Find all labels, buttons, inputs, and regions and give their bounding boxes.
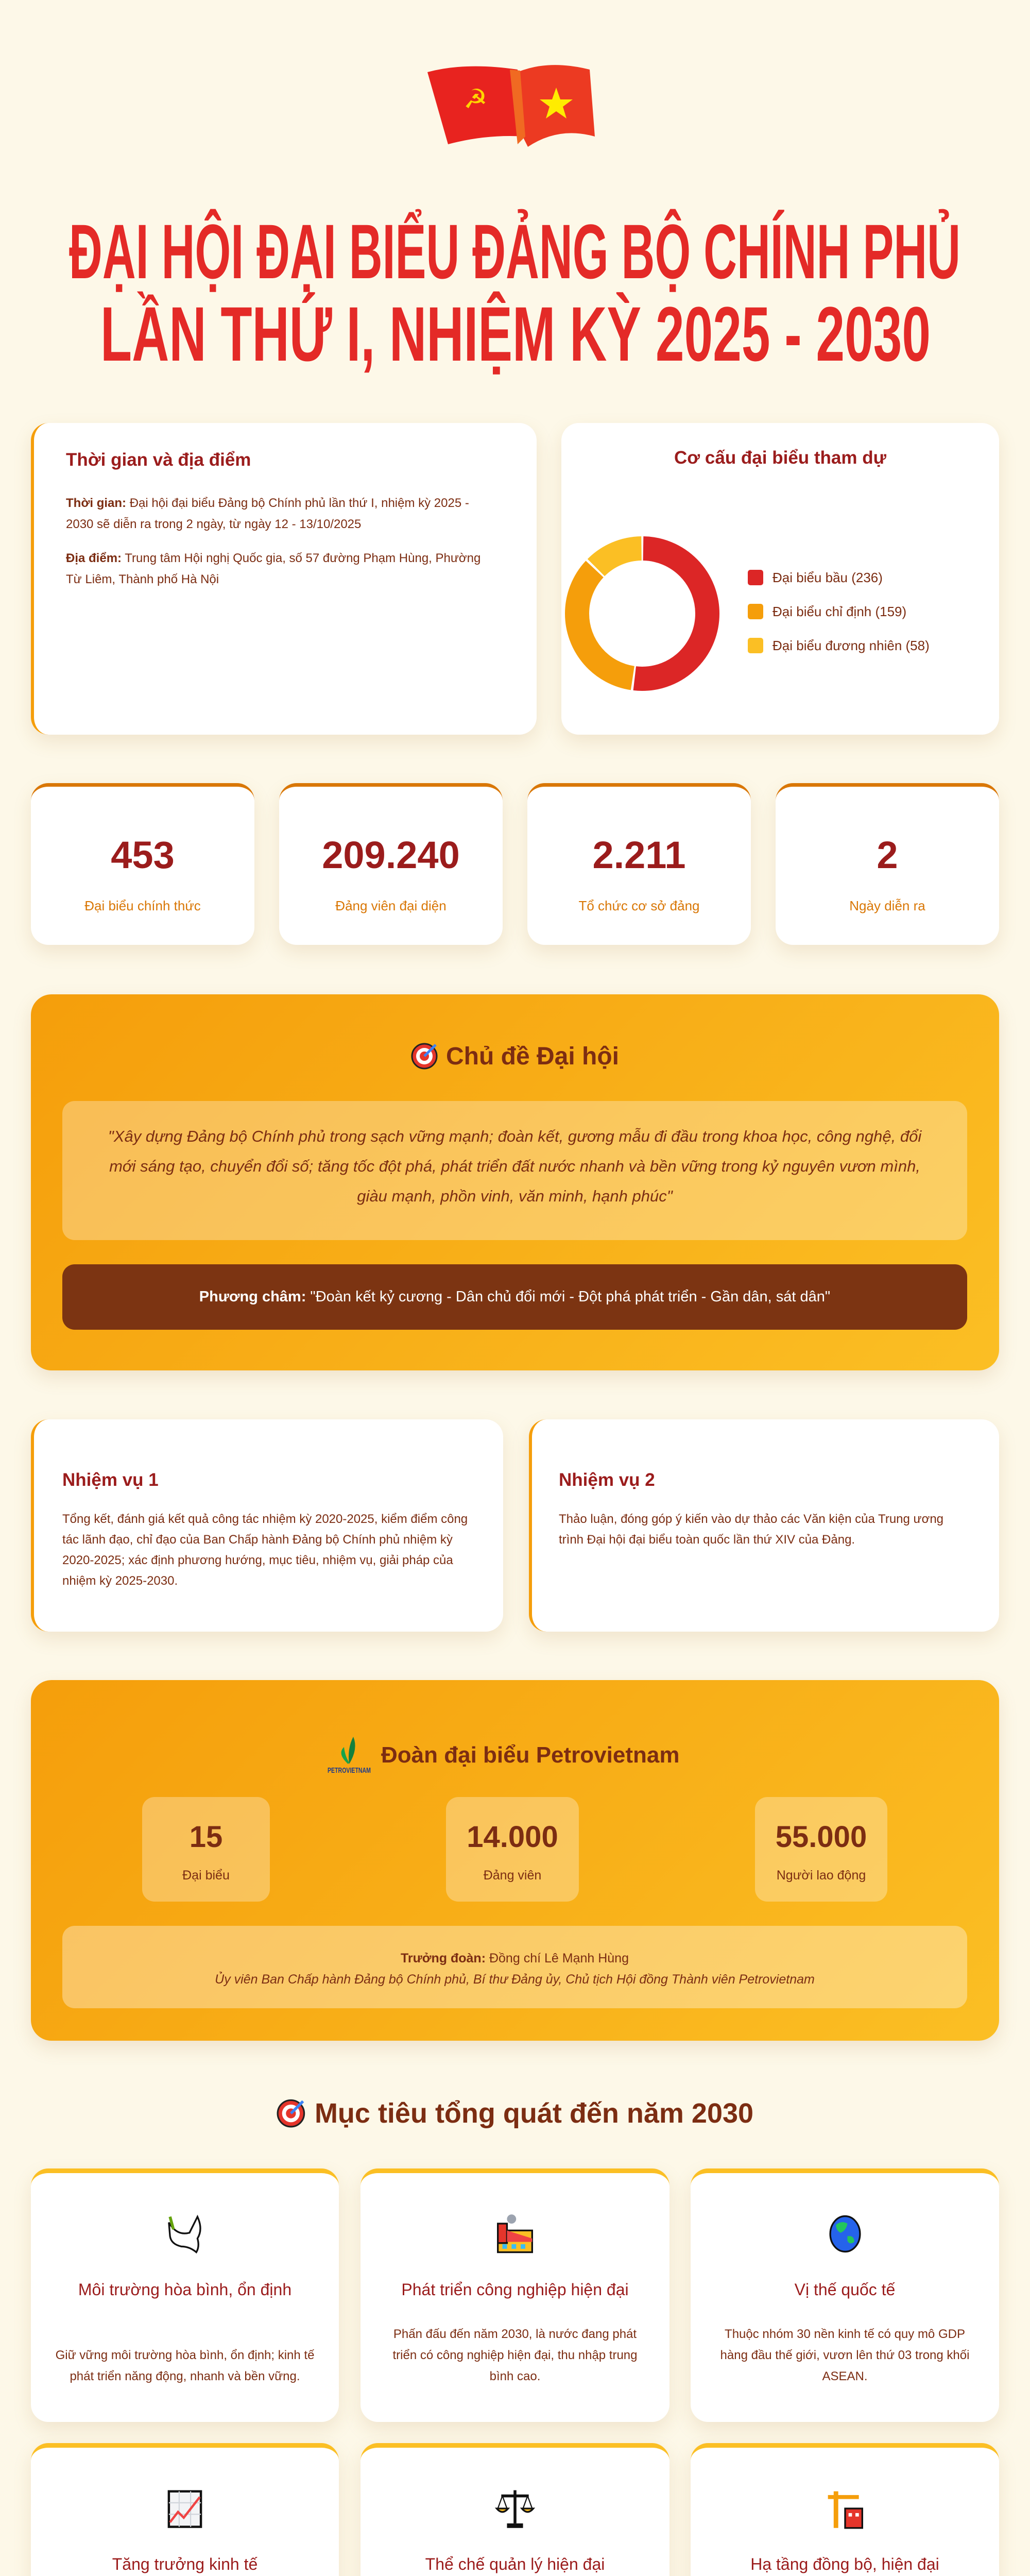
goal card: international: Vị thế quốc tế	[795, 2280, 895, 2299]
flag logo: ☭	[464, 84, 488, 115]
heading: general goals to 2030: Mục tiêu tổng quát đến năm 2030	[315, 2098, 753, 2129]
goal card: infrastructure: Hạ tầng đồng bộ, hiện đại	[750, 2555, 939, 2573]
title	[69, 208, 960, 376]
task 2	[529, 1419, 999, 1632]
goal card: industry: Phát triển công nghiệp hiện đại	[401, 2280, 629, 2299]
text: time and place details: Địa điểm: Trung tâm Hội nghị Quốc gia, số 57 đường Phạm Hùng, Phường Từ Liêm, Thành phố Hà Nội	[66, 551, 480, 586]
stat: 55.000 workers	[755, 1797, 887, 1902]
goal card: industry	[360, 2168, 670, 2422]
leader box: Ủy viên Ban Chấp hành Đảng bộ Chính phủ, Bí thư Đảng ủy, Chủ tịch Hội đồng Thành viên Petrovietnam	[215, 1972, 815, 1987]
heading: theme: Chủ đề Đại hội	[446, 1043, 619, 1070]
stat: 453	[31, 783, 254, 945]
quote box: "Xây dựng Đảng bộ Chính phủ trong sạch vững mạnh; đoàn kết, gương mẫu đi đầu trong khoa học, công nghệ, đổi mới sáng tạo, chuyển đổi số; tăng tốc đột phá, phát triển đất nước nhanh và bền vững trong kỷ nguyên vươn mình, giàu mạnh, phồn vinh, văn minh, hạnh phúc"	[108, 1127, 921, 1205]
stat: 453: Đại biểu chính thức	[84, 898, 201, 913]
heading: Petrovietnam: Đoàn đại biểu Petrovietnam	[381, 1742, 679, 1768]
quote box	[62, 1101, 967, 1240]
goal card: peace	[31, 2168, 339, 2422]
legend: Đại biểu chỉ định (159)	[772, 604, 906, 619]
stat: 209.240	[279, 783, 503, 945]
stat: 453: 453	[111, 834, 175, 876]
goal card: industry: Phấn đấu đến năm 2030, là nước đang phát triển có công nghiệp hiện đại, thu nhập trung bình cao.	[392, 2327, 638, 2383]
stat: 15 delegates: Đại biểu	[182, 1868, 230, 1883]
stat: 2	[776, 783, 999, 945]
goal card: infrastructure	[691, 2443, 999, 2576]
legend: Đại biểu bầu (236)	[772, 570, 883, 585]
motto bar	[62, 1264, 967, 1330]
flag logo	[427, 65, 595, 147]
stat: 55.000 workers: Người lao động	[777, 1868, 866, 1883]
stat: 2.211	[527, 783, 751, 945]
goal card: peace: Giữ vững môi trường hòa bình, ổn định; kinh tế phát triển năng động, nhanh và bền vững.	[56, 2348, 314, 2383]
text: time and place details: Thời gian: Đại hội đại biểu Đảng bộ Chính phủ lần thứ I, nhiệm kỳ 2025 - 2030 sẽ diễn ra trong 2 ngày, từ ngày 12 - 13/10/2025	[66, 496, 469, 531]
panel: theme	[31, 994, 999, 1370]
legend	[748, 570, 930, 653]
task 2: Nhiệm vụ 2	[559, 1470, 655, 1490]
heading: time and place: Thời gian và địa điểm	[66, 450, 251, 470]
stat: 55.000 workers: 55.000	[776, 1820, 867, 1854]
goal card: peace: Môi trường hòa bình, ổn định	[78, 2280, 291, 2299]
stat: 14.000 party members: Đảng viên	[484, 1868, 541, 1883]
goal card: economic growth: Tăng trưởng kinh tế	[112, 2555, 258, 2573]
motto bar: Phương châm: "Đoàn kết kỷ cương - Dân chủ đổi mới - Đột phá phát triển - Gần dân, sát dân"	[199, 1289, 830, 1305]
stat: 2: 2	[877, 834, 898, 876]
stat: 15 delegates	[142, 1797, 270, 1902]
stat: 2.211: 2.211	[592, 834, 686, 876]
donut chart	[565, 536, 719, 691]
logo: petrovietnam	[328, 1737, 371, 1775]
stat: 209.240: Đảng viên đại diện	[335, 898, 447, 913]
text: time and place details	[66, 496, 480, 586]
panel: delegate structure	[561, 423, 999, 735]
task 2: Thảo luận, đóng góp ý kiến vào dự thảo các Văn kiện của Trung ương trình Đại hội đại biểu toàn quốc lần thứ XIV của Đảng.	[559, 1512, 943, 1547]
stat: 14.000 party members	[446, 1797, 579, 1902]
goal card: economic growth	[31, 2443, 339, 2576]
goal card: institutions	[360, 2443, 670, 2576]
stat: 209.240: 209.240	[322, 834, 460, 876]
task 1	[31, 1419, 503, 1632]
heading: delegate structure: Cơ cấu đại biểu tham dự	[674, 448, 886, 468]
legend: Đại biểu đương nhiên (58)	[772, 638, 930, 653]
leader box: Trưởng đoàn: Đồng chí Lê Mạnh Hùng	[401, 1951, 629, 1965]
stat: 15 delegates: 15	[190, 1820, 222, 1854]
leader box	[62, 1926, 967, 2008]
stat: 2.211: Tổ chức cơ sở đảng	[578, 898, 700, 913]
task 1: Tổng kết, đánh giá kết quả công tác nhiệm kỳ 2020-2025, kiểm điểm công tác lãnh đạo, chỉ đạo của Ban Chấp hành Đảng bộ Chính phủ nhiệm kỳ 2020-2025; xác định phương hướng, mục tiêu, nhiệm vụ, giải pháp của nhiệm kỳ 2025-2030.	[62, 1512, 468, 1588]
goal card: international: Thuộc nhóm 30 nền kinh tế có quy mô GDP hàng đầu thế giới, vươn lên thứ 03 trong khối ASEAN.	[720, 2327, 969, 2383]
goal card: international	[691, 2168, 999, 2422]
panel: Petrovietnam delegation	[31, 1680, 999, 2041]
panel: time and place	[31, 423, 537, 735]
stat: 2: Ngày diễn ra	[849, 898, 925, 913]
goal card: institutions: Thể chế quản lý hiện đại	[425, 2555, 605, 2573]
stat: 14.000 party members: 14.000	[467, 1820, 558, 1854]
task 1: Nhiệm vụ 1	[62, 1470, 159, 1490]
